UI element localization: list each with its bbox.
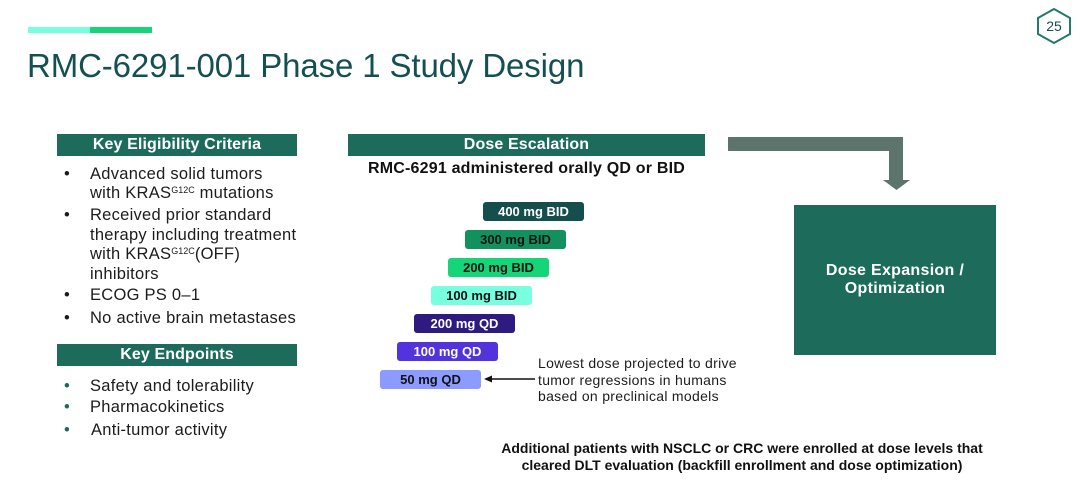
dose ladder xyxy=(380,202,584,389)
backfill note xyxy=(501,440,983,473)
endpoints list xyxy=(64,377,254,439)
lowest dose note: tumor regressions in humans xyxy=(538,372,727,388)
dose bar: 100 mg BID: 100 mg BID xyxy=(446,288,517,303)
icon: page number hexagon: 25 xyxy=(1046,18,1062,34)
endpoints list: Safety and tolerability xyxy=(90,377,254,395)
dose bar: 50 mg QD: 50 mg QD xyxy=(400,372,461,387)
lowest dose note: Lowest dose projected to drive xyxy=(538,355,737,371)
dose bar: 200 mg BID xyxy=(448,258,549,276)
bullet item: ECOG xyxy=(64,286,200,304)
eligibility criteria list: No active brain metastases xyxy=(90,309,296,327)
eligibility criteria list: therapy including treatment xyxy=(90,226,296,244)
panel: endpoints heading: Key Endpoints xyxy=(120,346,234,363)
eligibility criteria list: ECOG PS 0–1 xyxy=(90,286,200,304)
dose escalation subtitle: RMC-6291 administered orally QD or BID xyxy=(368,160,685,177)
eligibility criteria list: with KRASG12C(OFF) xyxy=(90,245,240,263)
bullet item: tumors xyxy=(64,165,274,202)
backfill note: cleared DLT evaluation (backfill enrollment and dose optimization) xyxy=(522,456,962,472)
bullet item: safety xyxy=(64,377,254,395)
bullet item: prior therapy: • xyxy=(64,206,70,224)
dose bar: 50 mg QD xyxy=(380,370,481,388)
panel: dose expansion: Optimization xyxy=(845,280,945,297)
dose bar: 200 mg QD: 200 mg QD xyxy=(431,316,498,331)
eligibility criteria list: Received prior standard xyxy=(90,206,271,224)
panel: dose expansion: Dose Expansion / xyxy=(826,262,964,279)
icon: page number hexagon xyxy=(1037,8,1071,44)
lowest dose note: based on preclinical models xyxy=(538,388,719,404)
panel: eligibility heading xyxy=(57,134,297,156)
bullet item: safety: • xyxy=(64,377,70,395)
backfill note: Additional patients with NSCLC or CRC were enrolled at dose levels that xyxy=(501,440,983,456)
dose bar: 100 mg QD xyxy=(397,342,498,360)
endpoints list: Pharmacokinetics xyxy=(90,398,225,416)
dose bar: 200 mg QD xyxy=(414,314,515,332)
panel: dose escalation heading xyxy=(348,134,705,156)
title: RMC-6291-001 Phase 1 Study Design xyxy=(27,47,584,84)
eligibility criteria list: with KRASG12C mutations xyxy=(90,184,274,202)
dose bar: 300 mg BID xyxy=(465,230,566,248)
panel: eligibility heading: Key Eligibility Criteria xyxy=(93,136,261,153)
dose bar: 400 mg BID: 400 mg BID xyxy=(498,204,569,219)
eligibility criteria list xyxy=(64,165,296,327)
accent bar xyxy=(28,27,152,33)
panel: dose expansion xyxy=(794,205,996,355)
bullet item: anti-tumor: • xyxy=(64,421,70,439)
eligibility criteria list: Advanced solid tumors xyxy=(90,165,263,183)
dose bar: 400 mg BID xyxy=(483,202,584,220)
endpoints list: Anti-tumor activity xyxy=(91,421,227,439)
bullet item: brain metastases: • xyxy=(64,309,70,327)
bullet item: prior therapy xyxy=(64,206,296,282)
arrow: lowest dose pointer xyxy=(484,376,535,382)
panel: dose escalation heading: Dose Escalation xyxy=(464,136,589,153)
dose bar: 200 mg BID: 200 mg BID xyxy=(463,260,534,275)
bullet item: PK xyxy=(64,398,225,416)
bullet item: ECOG: • xyxy=(64,286,70,304)
bullet item: PK: • xyxy=(64,398,70,416)
dose bar: 100 mg QD: 100 mg QD xyxy=(414,344,481,359)
dose bar: 300 mg BID: 300 mg BID xyxy=(480,232,551,247)
eligibility criteria list: inhibitors xyxy=(90,264,159,282)
dose bar: 100 mg BID xyxy=(431,286,532,304)
bullet item: tumors: • xyxy=(64,165,70,183)
bullet item: anti-tumor xyxy=(64,421,227,439)
panel: endpoints heading xyxy=(57,344,297,366)
lowest dose note xyxy=(538,355,737,404)
bullet item: brain metastases xyxy=(64,309,296,327)
arrow: escalation to expansion xyxy=(728,137,910,190)
